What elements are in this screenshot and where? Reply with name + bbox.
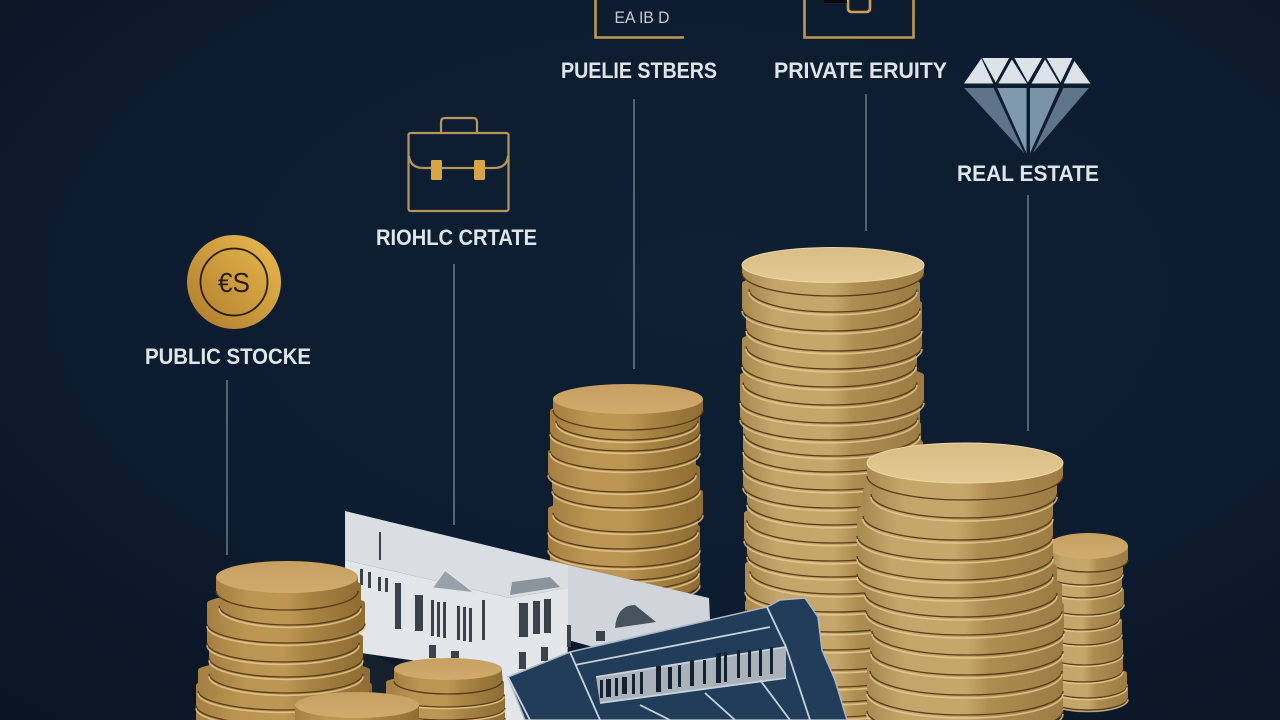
icon: top box with text	[596, 0, 684, 38]
connector line: mobile crate	[453, 264, 455, 525]
building dormer	[510, 577, 560, 595]
building right wing	[568, 565, 710, 660]
building facade	[345, 560, 568, 720]
icon: top box with text: EA IB D	[614, 8, 670, 27]
connector line: public stocks	[226, 380, 228, 555]
label: private eruity: PRIVATE ERUITY	[774, 58, 947, 83]
icon: briefcase	[408, 118, 508, 211]
coin stack: tallest	[740, 248, 927, 720]
building base shadow	[361, 650, 395, 700]
icon: diamond	[963, 58, 1091, 156]
coin stack: small middle	[385, 658, 505, 720]
connector line: public stbers	[633, 99, 635, 369]
coin stack: medium	[548, 384, 703, 604]
label: public stocke: PUBLIC STOCKE	[145, 344, 311, 369]
blueprint sheet	[508, 598, 847, 720]
icon: gold coin: €S	[218, 267, 250, 298]
building windows	[360, 532, 605, 669]
blueprint frame lines	[508, 607, 810, 720]
label: puelie stbers: PUELIE STBERS	[561, 58, 717, 83]
icon: gold coin	[187, 235, 281, 329]
building roof	[345, 511, 568, 598]
connector line: real estate	[1027, 195, 1029, 431]
coin stack: front large	[857, 443, 1064, 720]
connector line: private equity	[865, 94, 867, 231]
building pediment	[432, 570, 475, 593]
coin stack: front left	[196, 561, 376, 720]
illustration: rolled blueprint	[508, 598, 847, 720]
blueprint drawing panel	[596, 647, 786, 703]
coin: foreground small	[295, 692, 419, 720]
icon: top case with clasp	[804, 0, 914, 38]
illustration: building model	[345, 511, 710, 720]
coin stack: small right	[1043, 533, 1128, 712]
label: real estate: REAL ESTATE	[957, 161, 1099, 186]
building arch	[615, 605, 656, 628]
label: mohle crtate: RIOHLC CRTATE	[376, 225, 537, 250]
blueprint plan glyph	[600, 647, 773, 698]
